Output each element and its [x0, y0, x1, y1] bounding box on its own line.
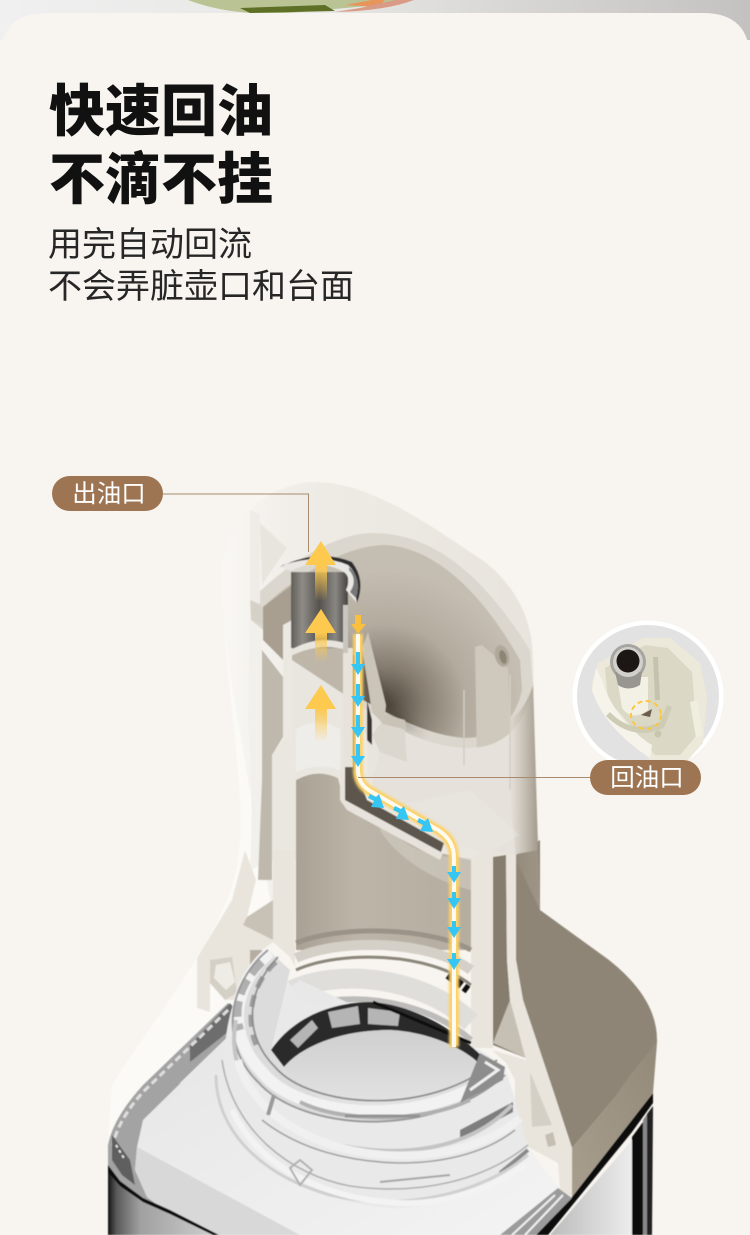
yellow up arrow 1	[305, 541, 336, 601]
blue flow arrows	[351, 652, 461, 970]
right cap strip	[471, 850, 505, 1048]
inset circle: return port close-up	[572, 620, 724, 772]
rim band	[108, 1003, 300, 1235]
top photo strip with bowl	[0, 0, 750, 40]
right metal body	[550, 1140, 632, 1235]
subtitle text	[48, 226, 354, 306]
title	[49, 80, 273, 211]
inner back wall rim	[251, 533, 533, 748]
cavity rib and screw hole	[475, 644, 512, 762]
small yellow return arrow	[351, 615, 366, 634]
return port leader line	[358, 776, 590, 778]
subtitle text: 不会弄脏壶口和台面	[48, 268, 354, 306]
dark cavity	[263, 545, 522, 738]
pale left cap wedge	[108, 575, 280, 1145]
ghost cap dome	[222, 482, 540, 915]
cream cross-section walls	[197, 850, 572, 1197]
top surface	[135, 980, 560, 1235]
oil outlet leader line	[163, 494, 308, 552]
ring streaks	[238, 952, 503, 1111]
lower left metal body	[108, 1167, 215, 1235]
taupe body right	[516, 840, 657, 1197]
metal tube	[280, 556, 361, 656]
lower cylinder interior	[296, 773, 471, 950]
oil return flow line	[358, 634, 454, 1047]
left inner walls	[248, 510, 296, 880]
glass bottle body	[108, 980, 653, 1235]
glass neck rings	[216, 950, 528, 1208]
central tube column	[292, 632, 444, 860]
title: 不滴不挂	[49, 148, 273, 211]
label: oil outlet: 出油口	[72, 481, 146, 508]
return channel	[345, 767, 444, 852]
neck base fill	[225, 950, 528, 1208]
right glass ends	[460, 1053, 505, 1103]
inner floor	[284, 1030, 485, 1112]
label: return port: 回油口	[610, 765, 684, 792]
label: return port	[590, 760, 701, 795]
back threads of glass neck	[288, 931, 471, 1040]
yellow up arrow 3	[305, 685, 336, 742]
label: oil outlet	[52, 476, 163, 511]
lower neck rings	[234, 1020, 512, 1151]
title: 快速回油	[49, 80, 273, 143]
yellow up arrow 2	[305, 609, 336, 663]
dark inner band	[271, 1002, 486, 1067]
left flange	[197, 850, 295, 1012]
subtitle text: 用完自动回流	[48, 226, 252, 264]
lower translucent cap panel	[345, 685, 538, 856]
